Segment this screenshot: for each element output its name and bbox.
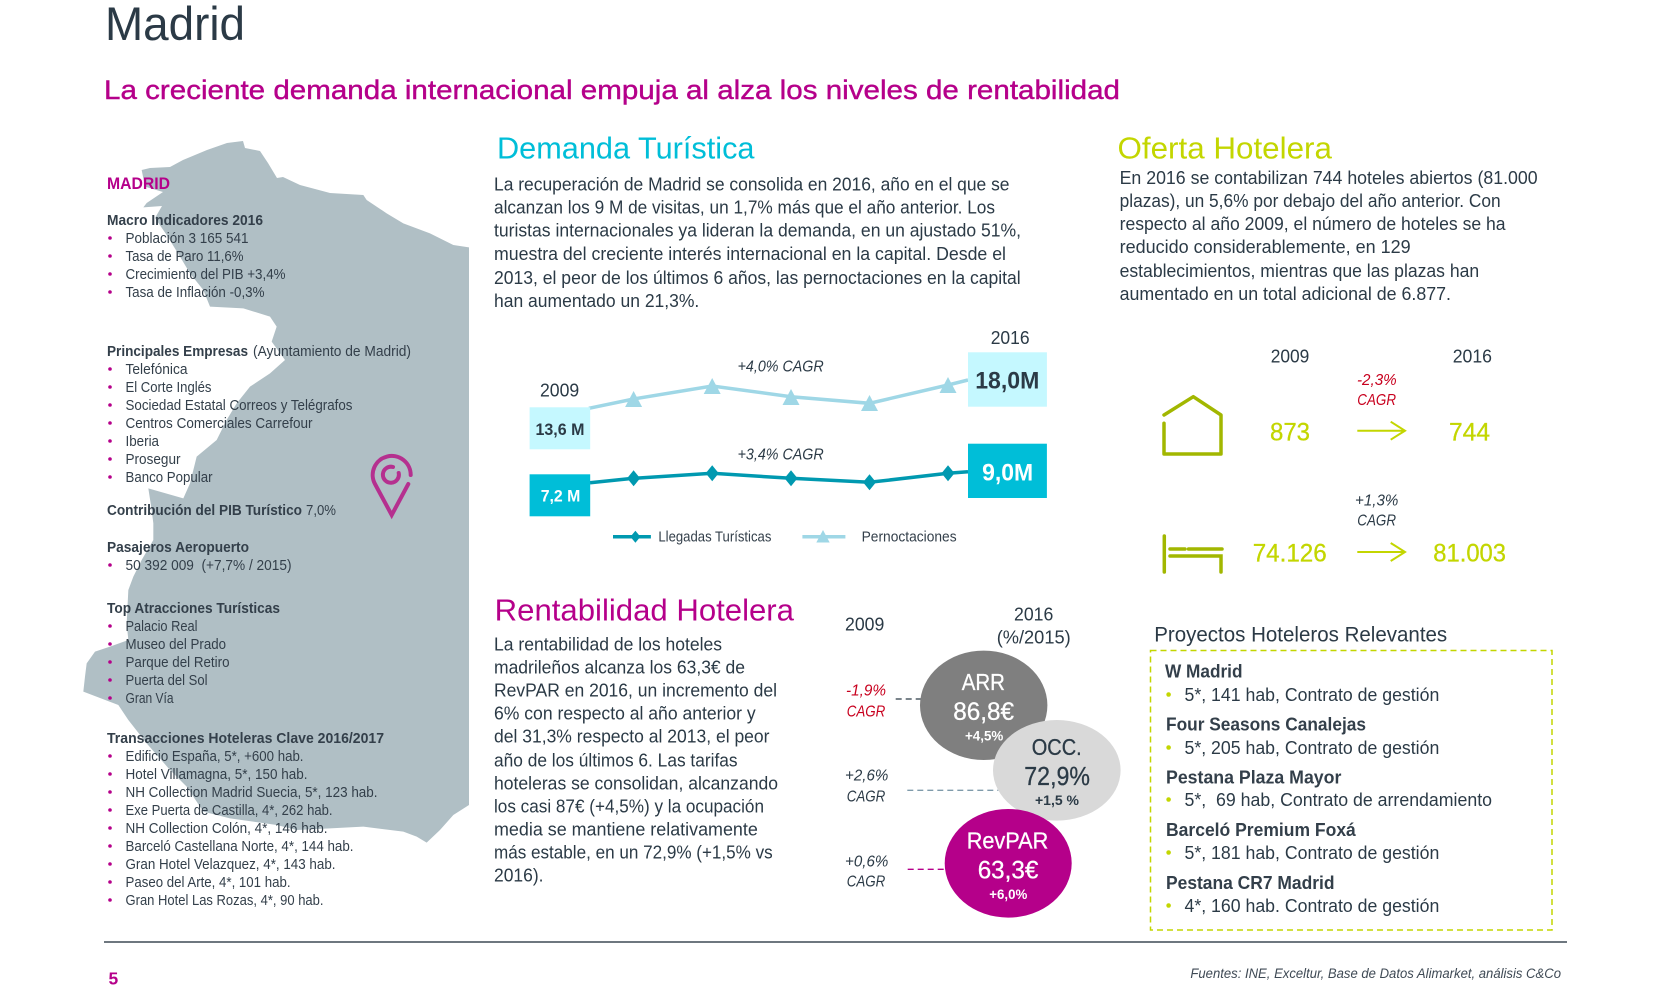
list: key hotel transactions: Paseo del Arte, 4*, 101 hab. xyxy=(126,875,290,891)
CAGR: hotels: -2,3% xyxy=(1357,372,1397,389)
text: tourism demand: muestra del creciente interés internacional en la capital. Desde el xyxy=(494,244,1006,264)
bubble: RevPAR: +6,0% xyxy=(989,886,1028,902)
CAGR label overnight stays: +4,0% CAGR xyxy=(738,359,824,376)
list: main companies: Telefónica xyxy=(126,362,188,378)
bubble: RevPAR: RevPAR xyxy=(967,827,1048,853)
legend: Pernoctaciones xyxy=(862,530,957,546)
text: tourism demand: han aumentado un 21,3%. xyxy=(494,291,699,311)
bubble: RevPAR xyxy=(945,809,1072,918)
text: hotel supply: reducido considerablemente, en 129 xyxy=(1120,237,1411,257)
panel: relevant hotel projects xyxy=(1150,650,1552,930)
list: macro indicators: Macro Indicadores 2016 xyxy=(107,213,263,229)
project: W Madrid xyxy=(1165,662,1439,705)
CAGR: hotels: CAGR xyxy=(1357,392,1396,409)
text: tourism demand xyxy=(494,175,1021,311)
text: hotel profitability: 2016). xyxy=(494,866,544,886)
bubble: RevPAR: 63,3€ xyxy=(978,856,1038,884)
project: Barceló Premium Foxá xyxy=(1166,820,1439,863)
list: main companies: Banco Popular xyxy=(126,470,213,486)
bubble: ARR: +4,5% xyxy=(965,728,1004,744)
list: key hotel transactions: NH Collection Colón, 4*, 146 hab. xyxy=(126,821,328,837)
project: Four Seasons Canalejas: Four Seasons Canalejas xyxy=(1166,714,1366,734)
year label 2016: 2016 xyxy=(1453,346,1492,367)
list: macro indicators: Población 3 165 541 xyxy=(126,231,248,247)
heading: MADRID: MADRID xyxy=(107,175,170,193)
project: Four Seasons Canalejas: 5*, 205 hab, Contrato de gestión xyxy=(1184,738,1439,758)
bubble: OCC: +1,5 % xyxy=(1035,792,1080,808)
text: tourism demand: La recuperación de Madrid se consolida en 2016, año en el que se xyxy=(494,175,1010,195)
series: arrivals xyxy=(590,465,968,490)
CAGR: ARR: -1,9% xyxy=(846,683,886,700)
icon: house xyxy=(1164,397,1221,454)
CAGR: rooms: CAGR xyxy=(1357,513,1396,530)
value: hotels 2009: 873 xyxy=(1270,419,1310,447)
icon: bed xyxy=(1164,536,1222,572)
text: hotel profitability: más estable, en un 72,9% (+1,5% vs xyxy=(494,843,773,863)
icon: map pin xyxy=(373,456,411,515)
year label 2009: 2009 xyxy=(845,614,884,635)
bubble: OCC: OCC. xyxy=(1032,734,1082,760)
legend: Llegadas Turísticas xyxy=(658,530,771,546)
year label 2016 versus 2015 xyxy=(997,604,1071,647)
map of Madrid region xyxy=(83,141,469,843)
list: key hotel transactions: Gran Hotel Velazquez, 4*, 143 hab. xyxy=(126,857,336,873)
year label 2016 versus 2015: (%/2015) xyxy=(997,626,1071,647)
CAGR: OCC: CAGR xyxy=(847,789,886,806)
legend xyxy=(613,530,957,546)
list: top attractions xyxy=(107,601,280,707)
text: hotel profitability: año de los últimos 6. Las tarifas xyxy=(494,751,738,771)
text: hotel supply: aumentado en un total adicional de 6.877. xyxy=(1120,284,1451,304)
project: Pestana Plaza Mayor xyxy=(1166,767,1492,810)
list: top attractions: Museo del Prado xyxy=(126,637,226,653)
panel: hotel supply figures xyxy=(1164,346,1506,572)
panel: Madrid facts xyxy=(107,175,411,909)
year label 2016: 2016 xyxy=(991,327,1030,348)
heading: relevant hotel projects: Proyectos Hoteleros Relevantes xyxy=(1154,623,1447,646)
year label 2009: 2009 xyxy=(1271,346,1309,367)
bubble: OCC: 72,9% xyxy=(1024,761,1090,791)
CAGR: ARR: CAGR xyxy=(847,704,886,721)
project: Barceló Premium Foxá: 5*, 181 hab, Contrato de gestión xyxy=(1184,843,1439,863)
list: main companies: Iberia xyxy=(126,434,160,450)
CAGR: RevPAR: +0,6% xyxy=(845,854,888,871)
text: hotel supply xyxy=(1120,168,1538,304)
project: W Madrid: 5*, 141 hab, Contrato de gestión xyxy=(1184,685,1439,705)
list: macro indicators: Crecimiento del PIB +3,4% xyxy=(126,267,286,283)
list: main companies: Sociedad Estatal Correos y Telégrafos xyxy=(126,398,352,414)
project: Barceló Premium Foxá: Barceló Premium Foxá xyxy=(1166,820,1357,840)
list: macro indicators: Tasa de Paro 11,6% xyxy=(126,249,244,265)
list: main companies: (Ayuntamiento de Madrid) xyxy=(253,344,411,360)
text: hotel profitability: madrileños alcanza los 63,3€ de xyxy=(494,658,745,678)
project: Four Seasons Canalejas xyxy=(1166,714,1439,758)
project: Pestana Plaza Mayor: Pestana Plaza Mayor xyxy=(1166,767,1341,787)
list: macro indicators: Tasa de Inflación -0,3% xyxy=(126,285,265,301)
text: hotel profitability: del 31,3% respecto al 2013, el peor xyxy=(494,727,770,747)
list: key hotel transactions: NH Collection Madrid Suecia, 5*, 123 hab. xyxy=(126,785,378,801)
text: hotel supply: establecimientos, mientras que las plazas han xyxy=(1120,261,1479,281)
text: tourism demand: turistas internacionales ya lideran la demanda, en un ajustado 51%, xyxy=(494,221,1021,241)
CAGR: hotels xyxy=(1357,372,1397,409)
list: key hotel transactions: Transacciones Hoteleras Clave 2016/2017 xyxy=(107,731,384,747)
project: W Madrid: W Madrid xyxy=(1165,662,1242,682)
value box: 9,0M xyxy=(968,444,1047,498)
value box: 18,0M xyxy=(968,352,1047,407)
list: key hotel transactions: Hotel Villamagna, 5*, 150 hab. xyxy=(126,767,308,783)
CAGR: ARR xyxy=(846,683,921,721)
heading: Oferta Hotelera: Oferta Hotelera xyxy=(1118,130,1333,165)
value: rooms 2016: 81.003 xyxy=(1433,540,1506,568)
project: Pestana Plaza Mayor: 5*, 69 hab, Contrato de arrendamiento xyxy=(1184,790,1492,810)
CAGR label arrivals: +3,4% CAGR xyxy=(738,446,824,463)
project: Pestana CR7 Madrid xyxy=(1166,873,1439,916)
list: key hotel transactions: Edificio España, 5*, +600 hab. xyxy=(126,749,304,765)
CAGR: OCC: +2,6% xyxy=(845,767,888,784)
list: top attractions: Parque del Retiro xyxy=(126,655,230,671)
text: hotel profitability: La rentabilidad de los hoteles xyxy=(494,635,722,655)
text: tourism GDP contribution: 7,0% xyxy=(306,503,336,519)
list: top attractions: Palacio Real xyxy=(126,619,198,635)
list: main companies: Principales Empresas xyxy=(107,344,248,360)
list: airport passengers: Pasajeros Aeropuerto xyxy=(107,540,249,556)
value: hotels 2016: 744 xyxy=(1449,419,1490,447)
text: hotel supply: plazas), un 5,6% por debajo del año anterior. Con xyxy=(1120,191,1501,211)
text: hotel profitability: RevPAR en 2016, un incremento del xyxy=(494,681,777,701)
text: hotel profitability xyxy=(494,635,778,886)
bubble: ARR: ARR xyxy=(962,669,1005,695)
line chart: arrivals and overnight stays xyxy=(530,327,1047,546)
value box: 13,6 M: 13,6 M xyxy=(536,421,584,439)
arrow: rooms xyxy=(1357,543,1405,561)
CAGR: RevPAR xyxy=(845,854,945,891)
list: main companies: Centros Comerciales Carrefour xyxy=(126,416,313,432)
list: top attractions: Gran Vía xyxy=(126,691,174,707)
project: Pestana CR7 Madrid: Pestana CR7 Madrid xyxy=(1166,873,1334,893)
list: main companies: Prosegur xyxy=(126,452,181,468)
subtitle: La creciente demanda internacional empuja al alza los niveles de rentabilidad xyxy=(104,75,1120,105)
bubble: ARR: 86,8€ xyxy=(953,698,1014,726)
CAGR: rooms: +1,3% xyxy=(1355,493,1398,510)
value box: 18,0M: 18,0M xyxy=(975,367,1039,394)
text: hotel profitability: hoteleras se consolidan, alcanzando xyxy=(494,774,778,794)
list: key hotel transactions xyxy=(107,731,384,909)
text: tourism demand: alcanzan los 9 M de visitas, un 1,7% más que el año anterior. Los xyxy=(494,198,995,218)
text: tourism GDP contribution: Contribución del PIB Turístico xyxy=(107,503,302,519)
CAGR: OCC xyxy=(845,767,998,806)
bubble: ARR xyxy=(920,651,1047,760)
CAGR: RevPAR: CAGR xyxy=(847,874,886,891)
bubble: OCC xyxy=(993,720,1121,821)
text: hotel supply: respecto al año 2009, el número de hoteles se ha xyxy=(1120,214,1507,234)
list: top attractions: Top Atracciones Turísticas xyxy=(107,601,280,617)
value box: 9,0M: 9,0M xyxy=(982,460,1033,487)
CAGR: rooms xyxy=(1355,493,1398,530)
value: rooms 2009: 74.126 xyxy=(1253,540,1327,568)
list: airport passengers: 50 392 009 (+7,7% / 2015) xyxy=(126,558,292,574)
year label 2009: 2009 xyxy=(540,380,579,401)
list: main companies xyxy=(107,344,411,486)
text: hotel supply: En 2016 se contabilizan 744 hoteles abiertos (81.000 xyxy=(1120,168,1538,188)
list: top attractions: Puerta del Sol xyxy=(126,673,208,689)
project: Pestana CR7 Madrid: 4*, 160 hab. Contrato de gestión xyxy=(1184,896,1439,916)
list: key hotel transactions: Gran Hotel Las Rozas, 4*, 90 hab. xyxy=(126,893,324,909)
value box: 13,6 M xyxy=(530,407,590,449)
text: hotel profitability: los casi 87€ (+4,5%) y la ocupación xyxy=(494,797,764,817)
list: key hotel transactions: Barceló Castellana Norte, 4*, 144 hab. xyxy=(126,839,354,855)
list: airport passengers xyxy=(107,540,292,574)
panel: profitability bubbles xyxy=(845,604,1121,918)
list: key hotel transactions: Exe Puerta de Castilla, 4*, 262 hab. xyxy=(126,803,332,819)
heading: Demanda Turística: Demanda Turística xyxy=(497,130,755,165)
text: hotel profitability: media se mantiene relativamente xyxy=(494,820,758,840)
text: hotel profitability: 6% con respecto al año anterior y xyxy=(494,704,756,724)
heading: Rentabilidad Hotelera: Rentabilidad Hotelera xyxy=(495,592,795,627)
text: tourism demand: 2013, el peor de los últimos 6 años, las pernoctaciones en la capital xyxy=(494,268,1021,288)
arrow: hotels xyxy=(1357,422,1405,440)
value box: 7,2 M: 7,2 M xyxy=(541,488,580,506)
list: macro indicators xyxy=(107,213,286,301)
series: overnight stays xyxy=(589,377,968,411)
list: main companies: El Corte Inglés xyxy=(126,380,212,396)
sources: Fuentes: INE, Exceltur, Base de Datos Alimarket, análisis C&Co xyxy=(1190,966,1561,981)
value box: 7,2 M xyxy=(530,474,590,516)
year label 2016 versus 2015: 2016 xyxy=(1014,604,1053,625)
